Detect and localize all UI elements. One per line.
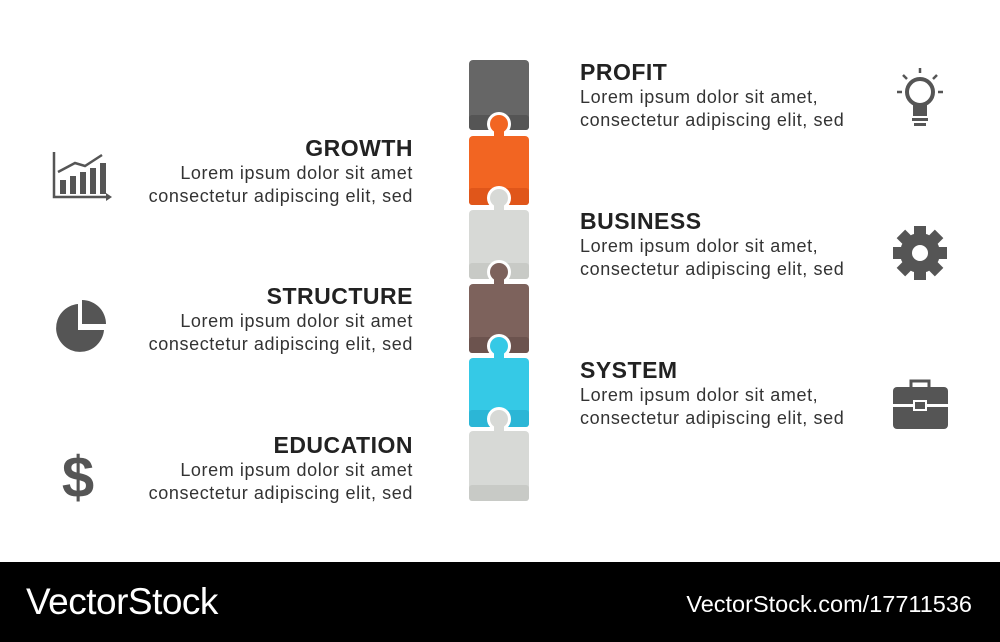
text: structure: STRUCTURE <box>267 283 413 309</box>
text: system: SYSTEM <box>580 357 678 383</box>
text: education: consectetur adipiscing elit, sed <box>149 483 413 503</box>
text: business: consectetur adipiscing elit, sed <box>580 259 844 279</box>
icon: lightbulb <box>897 68 943 126</box>
text: business: Lorem ipsum dolor sit amet, <box>580 236 818 256</box>
text: education: Lorem ipsum dolor sit amet <box>180 460 413 480</box>
piece 2 <box>469 136 529 205</box>
text: structure: Lorem ipsum dolor sit amet <box>180 311 413 331</box>
text: growth: consectetur adipiscing elit, sed <box>149 186 413 206</box>
piece 5 <box>469 358 529 427</box>
text: system: Lorem ipsum dolor sit amet, <box>580 385 818 405</box>
text: growth: Lorem ipsum dolor sit amet <box>180 163 413 183</box>
footer url: VectorStock.com/17711536 <box>686 591 972 617</box>
text: growth: GROWTH <box>305 135 413 161</box>
text: profit: PROFIT <box>580 59 667 85</box>
icon: growth chart <box>54 152 112 201</box>
text: structure <box>149 283 413 354</box>
footer logo: VectorStock <box>26 581 218 622</box>
footer <box>0 562 1000 642</box>
text: business: BUSINESS <box>580 208 702 234</box>
text: education <box>149 432 413 503</box>
text: system <box>580 357 844 428</box>
text: education: EDUCATION <box>273 432 413 458</box>
tabs <box>487 112 511 433</box>
text: profit: consectetur adipiscing elit, sed <box>580 110 844 130</box>
icon: briefcase <box>893 381 948 429</box>
icon: pie chart <box>56 300 106 352</box>
piece 6 <box>469 431 529 501</box>
piece 1 <box>469 60 529 130</box>
icon: dollar: $ <box>62 445 94 510</box>
text: system: consectetur adipiscing elit, sed <box>580 408 844 428</box>
text: business <box>580 208 844 279</box>
text: growth <box>149 135 413 206</box>
piece 3 <box>469 210 529 279</box>
icon: gear <box>893 226 947 280</box>
text: structure: consectetur adipiscing elit, sed <box>149 334 413 354</box>
text: profit: Lorem ipsum dolor sit amet, <box>580 87 818 107</box>
text: profit <box>580 59 844 130</box>
piece 4 <box>469 284 529 353</box>
